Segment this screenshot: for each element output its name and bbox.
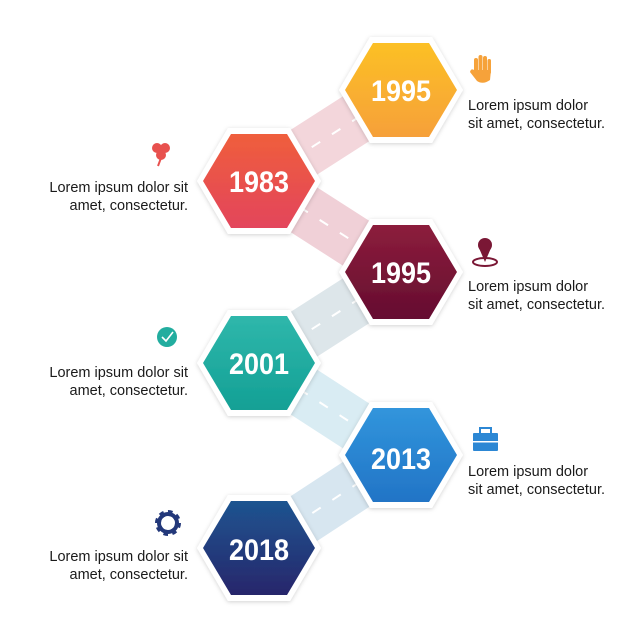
hexagon 1983 bbox=[197, 128, 321, 234]
hexagon 2001: 2001 bbox=[229, 348, 289, 381]
text: 1995 top bbox=[468, 98, 605, 132]
text: 2001: Lorem ipsum dolor sit bbox=[49, 365, 188, 381]
hexagon 1995 maroon bbox=[339, 219, 463, 325]
text: 2001: amet, consectetur. bbox=[70, 383, 188, 399]
text: 2001 bbox=[49, 365, 188, 399]
hexagon 2013: 2013 bbox=[371, 443, 431, 476]
text: 2018: amet, consectetur. bbox=[70, 567, 188, 583]
icon: teal circle bbox=[157, 327, 177, 347]
hexagon 1983: 1983 bbox=[229, 166, 289, 199]
icon: pin bbox=[473, 238, 497, 266]
text: 1995 maroon: sit amet, consectetur. bbox=[468, 297, 605, 313]
icon: gear bbox=[158, 513, 178, 533]
text: 1995 maroon: Lorem ipsum dolor bbox=[468, 279, 588, 295]
text: 2018: Lorem ipsum dolor sit bbox=[49, 549, 188, 565]
hexagon 2001 bbox=[197, 310, 321, 416]
icon: briefcase bbox=[473, 428, 498, 451]
text: 1983 bbox=[49, 180, 188, 214]
text: 1983: Lorem ipsum dolor sit bbox=[49, 180, 188, 196]
text: 2013: sit amet, consectetur. bbox=[468, 482, 605, 498]
text: 2013: Lorem ipsum dolor bbox=[468, 464, 588, 480]
hexagon 2018 bbox=[197, 495, 321, 601]
icon: clover bbox=[152, 143, 170, 166]
hexagon 2018: 2018 bbox=[229, 534, 289, 567]
text: 1995 top: sit amet, consectetur. bbox=[468, 116, 605, 132]
hexagon 1995 maroon: 1995 bbox=[371, 257, 431, 290]
hexagon 1995 top bbox=[339, 37, 463, 143]
text: 2018 bbox=[49, 549, 188, 583]
hexagon 1995 top: 1995 bbox=[371, 75, 431, 108]
text: 1995 top: Lorem ipsum dolor bbox=[468, 98, 588, 114]
connectors bbox=[259, 90, 401, 548]
hexagon 2013 bbox=[339, 402, 463, 508]
text: 1995 maroon bbox=[468, 279, 605, 313]
text: 1983: amet, consectetur. bbox=[70, 198, 188, 214]
icon: hand bbox=[470, 55, 491, 83]
text: 2013 bbox=[468, 464, 605, 498]
